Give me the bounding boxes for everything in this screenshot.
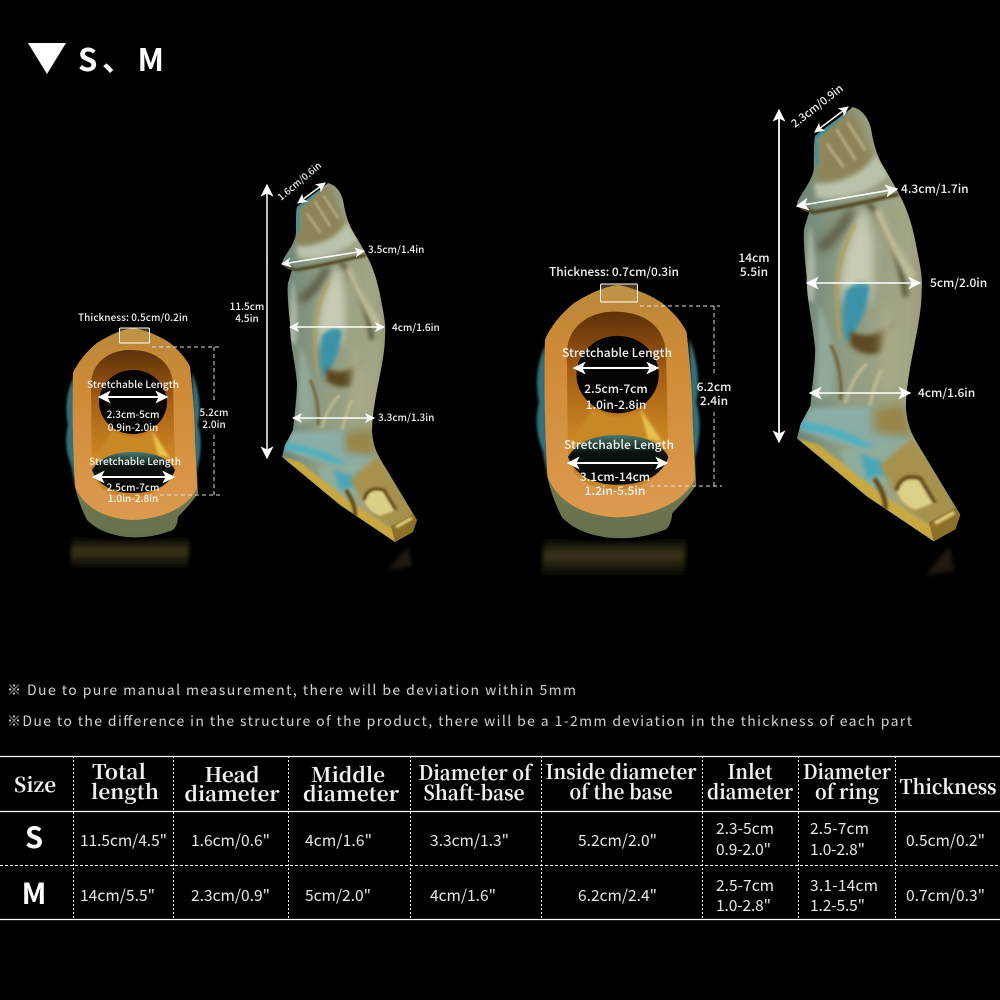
row M: 3.1-14cm <box>810 874 878 896</box>
lower stretch measure S <box>89 453 181 505</box>
lower stretch measure M: 1.2in-5.5in <box>585 482 645 499</box>
row S: 11.5cm/4.5" <box>80 829 167 851</box>
note: structure deviation: ※Due to the difference in the structure of the product, there will be a 1-2mm deviation in the thickness of each part <box>7 711 913 731</box>
table header: Inside diameter <box>546 756 696 785</box>
lower stretch measure S: 2.5cm-7cm <box>107 479 159 494</box>
title: size S and M <box>28 35 164 80</box>
side measurements S: 1.6cm/0.6in <box>274 158 324 203</box>
row M: 14cm/5.5" <box>80 884 155 906</box>
side measurements S: 3.5cm/1.4in <box>368 241 424 256</box>
side measurements M: 5.5in <box>740 263 768 280</box>
product side view: size S <box>270 175 430 570</box>
side measurements M: 4.3cm/1.7in <box>901 180 969 197</box>
side measurements S: 3.3cm/1.3in <box>378 409 434 424</box>
row M: 4cm/1.6" <box>430 884 496 906</box>
product front view: size M <box>537 285 700 578</box>
note: manual measurement: ※ Due to pure manual measurement, there will be deviation within 5mm <box>7 680 576 700</box>
table header: Inlet <box>728 756 773 785</box>
row M: 0.7cm/0.3" <box>906 884 985 906</box>
row S: 1.6cm/0.6" <box>191 829 270 851</box>
row S <box>25 815 985 860</box>
row S: 0.9-2.0" <box>716 838 771 860</box>
table header: Shaft-base <box>424 777 524 806</box>
row S: 2.3-5cm <box>716 817 774 839</box>
base height dimension S: 2.0in <box>202 416 226 431</box>
base height dimension S <box>152 347 228 495</box>
title: size S and M: S、M <box>78 35 164 80</box>
size table <box>0 756 1000 920</box>
table header: of ring <box>815 776 879 805</box>
thickness callout S <box>78 309 188 343</box>
side measurements S: 11.5cm <box>230 298 264 313</box>
product side view: size M <box>782 97 976 575</box>
thickness callout M <box>549 263 679 302</box>
table header: diameter <box>184 778 280 807</box>
row S: S <box>25 815 43 857</box>
lower stretch measure M: 3.1cm-14cm <box>580 468 650 485</box>
lower stretch measure M: Stretchable Length <box>564 436 674 453</box>
row M: 2.5-7cm <box>716 874 774 896</box>
table header <box>14 756 997 807</box>
row M: M <box>22 871 46 913</box>
base height dimension M <box>640 306 731 486</box>
row M: 1.2-5.5" <box>810 894 865 916</box>
row M: 1.0-2.8" <box>716 894 771 916</box>
lower stretch measure S: 1.0in-2.8in <box>108 490 158 505</box>
row M: 6.2cm/2.4" <box>578 884 657 906</box>
row S: 2.5-7cm <box>810 817 869 839</box>
row S: 5.2cm/2.0" <box>578 829 657 851</box>
row S: 1.0-2.8" <box>810 838 865 860</box>
side measurements S: 4.5in <box>235 310 259 325</box>
upper stretch measure M: Stretchable Length <box>562 344 672 361</box>
table header: Diameter of <box>418 757 533 786</box>
thickness callout M: Thickness: 0.7cm/0.3in <box>549 263 679 280</box>
table header: Middle <box>311 759 385 788</box>
side measurements M: 5cm/2.0in <box>930 274 987 291</box>
table header: Size <box>14 769 56 798</box>
upper stretch measure M: 1.0in-2.8in <box>586 396 646 413</box>
side measurements M <box>738 80 987 442</box>
row M: 5cm/2.0" <box>305 884 371 906</box>
row M <box>22 871 985 916</box>
side measurements M: 4cm/1.6in <box>918 384 975 401</box>
table header: length <box>91 776 159 805</box>
table header: of the base <box>570 776 672 805</box>
upper stretch measure M: 2.5cm-7cm <box>584 380 648 397</box>
row M: 2.3cm/0.9" <box>191 884 270 906</box>
product front view: size S <box>66 328 201 570</box>
side measurements M: 14cm <box>738 249 770 266</box>
side measurements S <box>230 158 440 458</box>
lower stretch measure S: Stretchable Length <box>89 453 181 468</box>
base height dimension M: 2.4in <box>700 392 728 409</box>
side measurements S: 4cm/1.6in <box>392 319 440 334</box>
row S: 4cm/1.6" <box>305 829 372 851</box>
base height dimension M: 6.2cm <box>697 378 731 395</box>
table header: diameter <box>303 778 399 807</box>
lower stretch measure M <box>564 436 674 499</box>
table header: Total <box>92 756 146 785</box>
base height dimension S: 5.2cm <box>200 404 228 419</box>
upper stretch measure M <box>562 344 672 413</box>
thickness callout S: Thickness: 0.5cm/0.2in <box>78 309 188 324</box>
side measurements M: 2.3cm/0.9in <box>788 80 846 131</box>
row S: 0.5cm/0.2" <box>906 829 985 851</box>
table header: Head <box>204 759 260 788</box>
upper stretch measure S: Stretchable Length <box>87 376 179 391</box>
table header: diameter <box>707 776 793 805</box>
row S: 3.3cm/1.3" <box>430 829 509 851</box>
upper stretch measure S: 0.9in-2.0in <box>108 419 158 434</box>
table header: Diameter <box>803 756 891 785</box>
upper stretch measure S: 2.3cm-5cm <box>107 406 159 421</box>
upper stretch measure S <box>87 376 179 434</box>
